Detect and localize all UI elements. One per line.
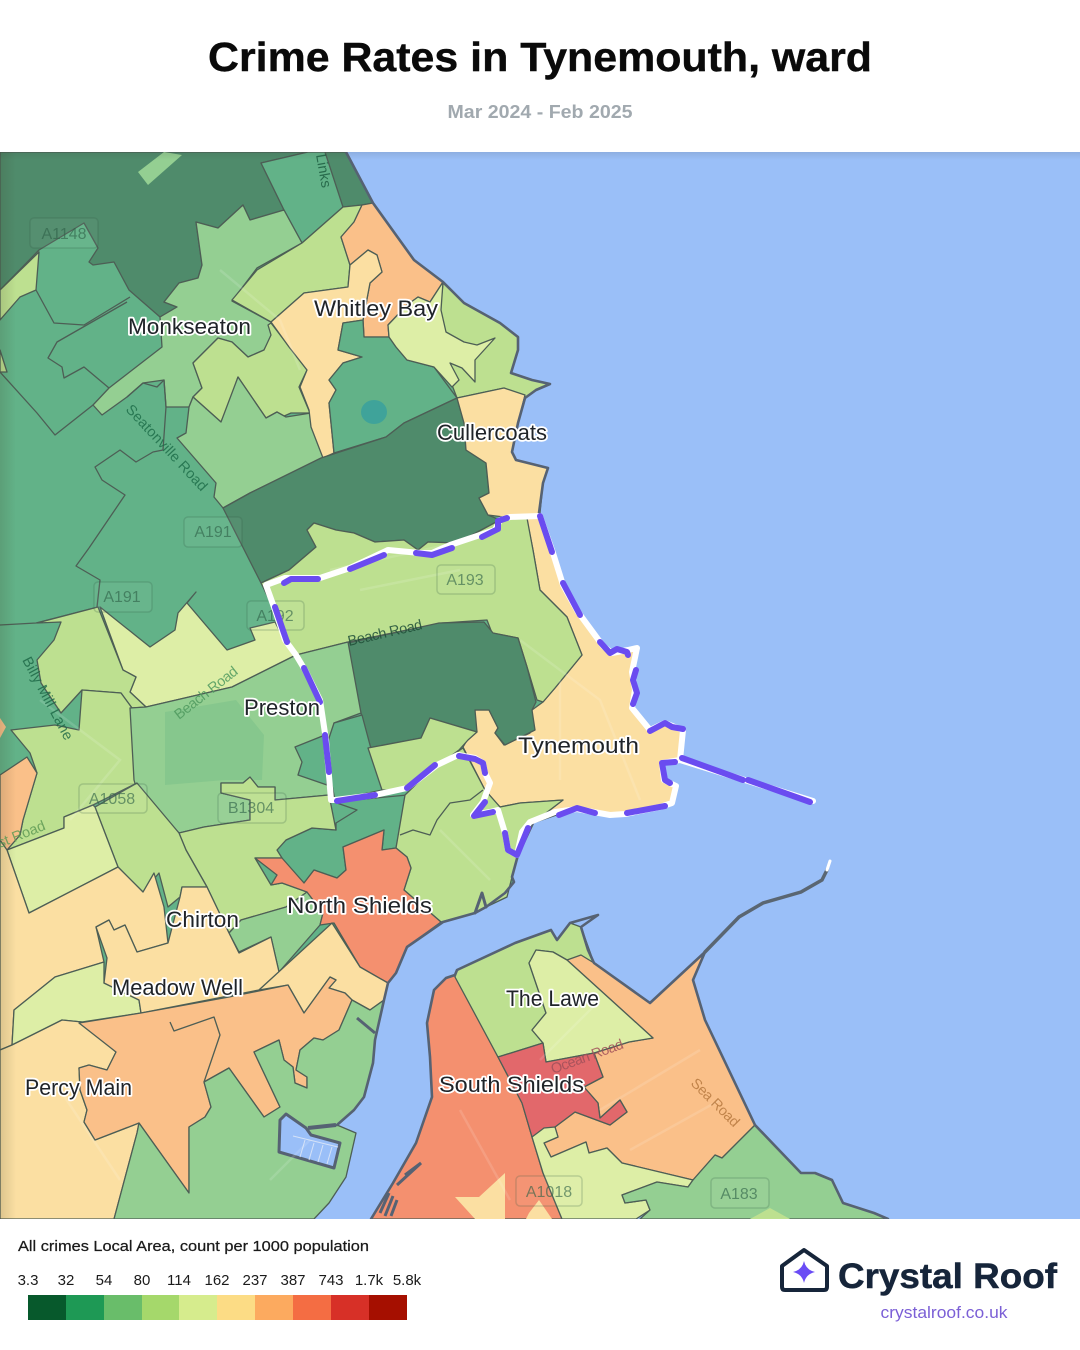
place labels: The Lawe [506,986,599,1011]
wards: north-west low crime [0,152,373,625]
legend scale labels: 1.7k [355,1272,384,1289]
wards: dark band north of route [223,398,500,583]
wards: big dark block [348,622,536,748]
place labels [25,296,639,1100]
road shields [30,218,769,1208]
road shields: A191 [103,589,141,606]
icon: house with star [782,1250,827,1290]
place labels: Tynemouth [518,733,639,758]
legend scale labels: 743 [318,1272,344,1289]
river piers [357,1018,421,1216]
road names: Beach Road [346,617,424,650]
place labels: North Shields [287,893,432,918]
place labels: Percy Main [25,1075,132,1100]
wards: west light greens [0,607,477,972]
road names: Ocean Road [549,1037,626,1078]
road names [0,153,742,1131]
dock [279,1114,340,1168]
legend scale labels: 237 [242,1272,268,1289]
wards: Whitley Bay [232,203,550,458]
legend colour swatches [28,1295,407,1320]
legend scale labels: 80 [134,1272,150,1289]
legend scale labels: 162 [204,1272,230,1289]
wards: lower-left cream [0,840,388,1219]
pond [361,400,387,424]
road shields: A183 [720,1186,758,1203]
road names: Beach Road [172,664,241,723]
legend scale labels [18,1272,422,1289]
legend scale labels: 54 [96,1272,112,1289]
road names: Sea Road [687,1076,742,1131]
road shields: A1058 [89,791,135,808]
legend scale labels: 3.3 [18,1272,38,1289]
breakwater tip light [827,861,830,870]
south bank wards [371,923,888,1219]
road shields: A193 [446,572,484,589]
wards: east of North Shields [396,748,563,922]
place labels: Whitley Bay [314,296,438,321]
logo: Crystal Roof [782,1250,1057,1322]
north bank land base [0,224,542,973]
place labels: Preston [244,695,320,720]
subtitle: date range: Mar 2024 - Feb 2025 [448,101,632,122]
ward: North Shields [255,830,441,983]
wards: pale west of Preston [100,592,296,707]
legend scale labels: 32 [58,1272,74,1289]
wards: Preston light green [261,518,582,702]
road names: Seatonville Road [122,402,210,495]
legend title: All crimes Local Area, count per 1000 population [18,1238,369,1255]
place labels: South Shields [439,1072,584,1097]
route purple dashes [275,516,810,855]
faint street network [40,270,720,1200]
road shields: A1018 [526,1184,572,1201]
ward route: Tynemouth boundary [266,516,813,855]
title: Crime Rates in Tynemouth, ward [208,34,872,80]
sea [315,152,1080,1219]
wordmark: Crystal Roof [838,1257,1057,1296]
ward boundaries in the western green area [0,290,166,625]
legend scale labels: 5.8k [393,1272,422,1289]
north breakwater tip [705,870,827,952]
legend scale labels: 114 [167,1272,191,1289]
ward: Percy Main orange [79,977,352,1193]
website url: crystalroof.co.uk [880,1304,1008,1322]
road names: Billy Mill Lane [18,654,76,743]
road shields: A1148 [41,226,87,243]
top shading [6,152,1080,158]
ward: riverside green [114,1000,384,1219]
road shields: A191 [194,524,232,541]
place labels: Chirton [166,907,239,932]
route white underlay [266,516,813,855]
edge shading [0,152,12,1218]
road names: Links [312,153,334,189]
inner boundaries in Percy Main [170,1017,220,1082]
coastline [337,152,888,1219]
place labels: Monkseaton [128,314,251,339]
road shields: A192 [256,608,294,625]
road shields: B1304 [228,800,274,817]
boundary line east of North Shields [400,790,483,835]
map panel [0,152,1080,1219]
wards: Cullercoats to Tynemouth cream [457,388,683,823]
legend [18,1238,422,1320]
place labels: Cullercoats [437,420,547,445]
legend scale labels: 387 [280,1272,306,1289]
place labels: Meadow Well [112,975,243,1000]
